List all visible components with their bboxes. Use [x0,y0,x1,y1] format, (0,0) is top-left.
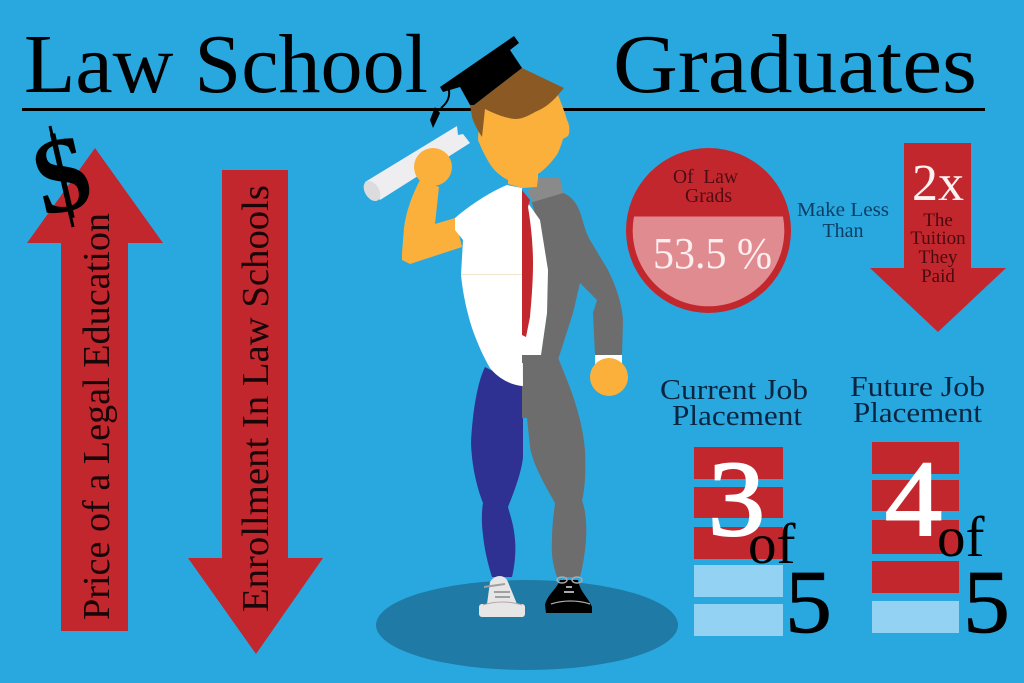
icon: diploma [360,126,470,204]
right hand [590,358,628,396]
icon: white sneaker [479,576,525,617]
heading: Placement [672,400,802,432]
neck [508,172,538,188]
circle stat: 53.5 percent: Of Law [673,166,739,188]
down arrow: enrollment in law schools: Enrollment In Law Schools [235,185,277,612]
down arrow: 2x the tuition they paid: Tuition [910,228,966,249]
number: 3 of 5: 5 [785,553,832,652]
heading: Placement [853,397,982,429]
wrist cuff [595,355,622,368]
circle stat: 53.5 percent [626,148,791,313]
grey collar [527,178,563,202]
down arrow: 2x the tuition they paid [870,143,1006,332]
ground shadow [376,580,678,670]
title: Graduates [613,18,977,111]
icon: black dress shoe [545,577,592,613]
graduate figure [360,36,628,617]
stacked bars 4 of 5 [872,442,959,633]
shirt left half [455,185,523,386]
number: 3 of 5 [708,440,832,652]
text: make less than [797,199,889,242]
up arrow: price of a legal education: Price of a Legal Education [76,213,118,620]
number: 4 of 5: 5 [963,553,1010,652]
circle stat: 53.5 percent: 53.5 % [653,229,772,278]
seam [461,274,523,275]
blue trouser leg [471,367,523,577]
heading [850,371,985,429]
circle stat: 53.5 percent: Grads [685,185,732,207]
number: 4 of 5 [885,440,1010,652]
icon: dollar sign: $ [22,111,102,240]
panel: future job placement [850,371,1010,652]
number: 4 of 5: 4 [885,440,942,559]
title: Law School [24,18,428,111]
down arrow: 2x the tuition they paid: 2x [912,155,964,212]
heading: Future Job [850,371,985,403]
up arrow: price of a legal education [27,148,163,631]
down arrow: 2x the tuition they paid: The [923,210,953,231]
red tie [522,190,533,337]
number: 3 of 5: 3 [708,440,765,559]
down arrow: enrollment in law schools [188,170,323,654]
title [22,18,985,111]
hair [470,68,564,137]
number: 4 of 5: of [937,506,984,569]
stacked bars 3 of 5 [694,447,783,636]
grey trouser leg [522,355,586,577]
head [478,95,569,181]
raised arm [402,148,462,264]
white shirt front [522,200,548,355]
number: 3 of 5: of [748,513,796,576]
down arrow: 2x the tuition they paid: Paid [921,266,955,287]
text: make less than: Make Less [797,199,889,221]
text: make less than: Than [822,220,864,242]
down arrow: 2x the tuition they paid: They [918,247,958,268]
panel: current job placement [660,374,832,652]
grey jacket [522,193,623,363]
heading [660,374,808,432]
icon: graduation cap [430,36,522,128]
heading: Current Job [660,374,808,406]
